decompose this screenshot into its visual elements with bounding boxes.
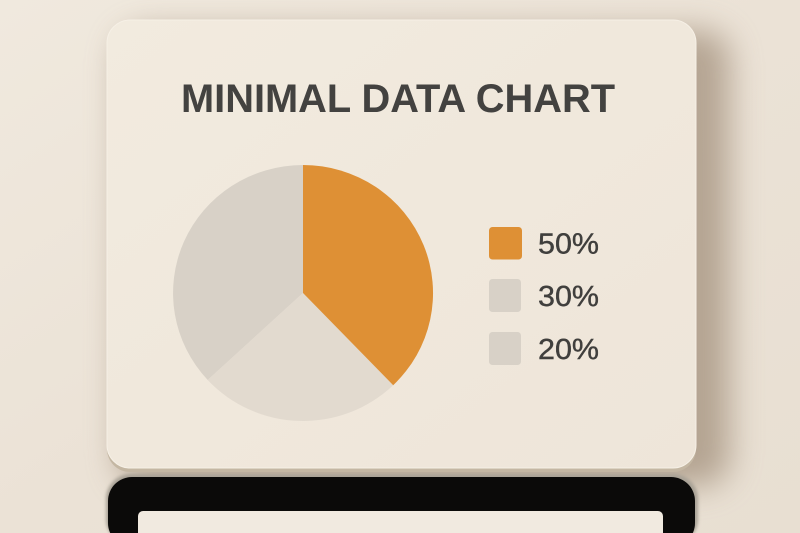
panel: chart card bbox=[107, 20, 696, 472]
legend bbox=[489, 227, 599, 366]
tablet device bbox=[106, 474, 698, 533]
slice: orange bbox=[303, 165, 433, 385]
legend item: 20%: 20% bbox=[538, 334, 599, 366]
title: MINIMAL DATA CHART bbox=[181, 77, 615, 121]
card shadow bbox=[118, 30, 730, 486]
tablet screen bbox=[138, 511, 663, 533]
slice: dark grey bbox=[173, 165, 303, 380]
legend item: 30%: 30% bbox=[538, 281, 599, 313]
pie chart bbox=[173, 165, 433, 421]
legend item: 50%: 50% bbox=[538, 228, 599, 260]
slice: light grey bbox=[208, 293, 393, 421]
